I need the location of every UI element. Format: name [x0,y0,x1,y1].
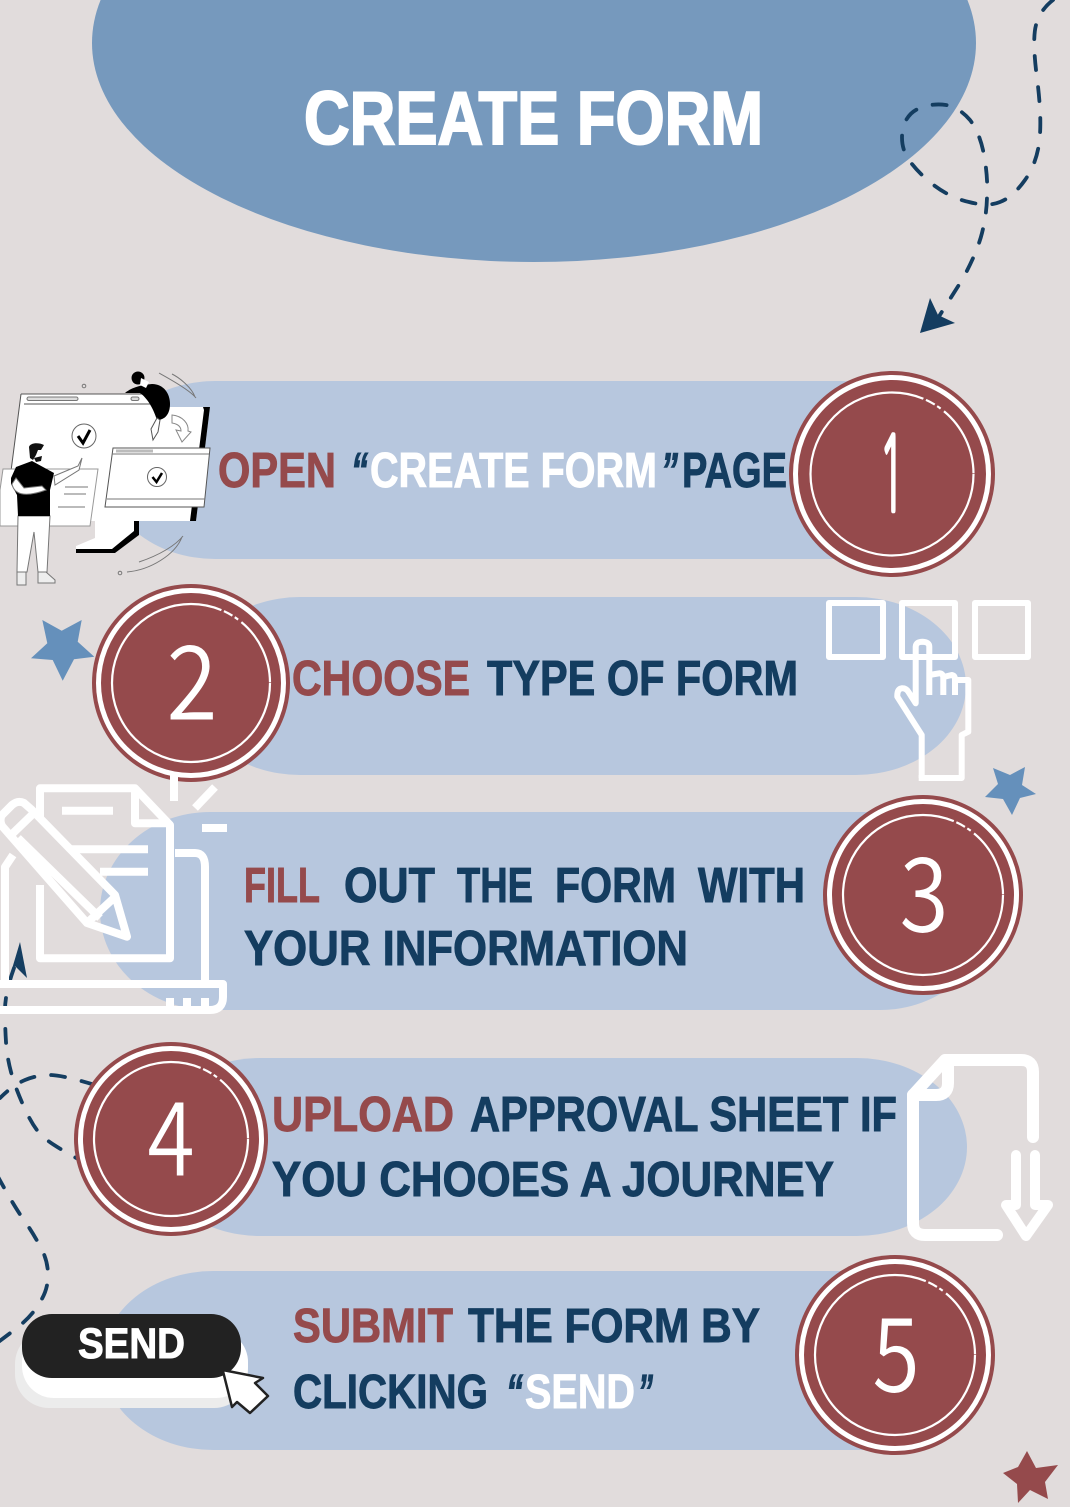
step 4 pill [150,1058,967,1236]
step 2 text: TYPE OF FORM [487,652,798,706]
icon: document and pencil on laptop [0,775,227,1010]
step 4 text: YOU CHOOES A JOURNEY [272,1153,834,1207]
step 5 pill [103,1271,985,1450]
step 5 text [293,1300,760,1419]
step 1 text: PAGE [682,444,787,498]
step 1 text: CREATE FORM [370,444,657,498]
step 3 pill [100,812,990,1010]
step 2 number badge [92,584,290,782]
step 2 text [292,652,798,706]
star: blue right [985,767,1036,815]
step 1 number badge: 1 [879,422,905,526]
step 2 text: CHOOSE [292,652,470,706]
step 5 text: “ [506,1366,523,1419]
step 3 text: FORM [555,859,676,913]
step 3 number badge [823,795,1023,995]
step 1 pill [105,381,950,559]
step 5 text: THE FORM BY [468,1300,760,1353]
step 2 pill [190,597,966,775]
title: CREATE FORM [304,76,763,160]
step 1 text: “ [351,444,368,498]
step 3 text: WITH [698,859,805,913]
step 1 text: ” [661,444,678,498]
send button [15,1314,248,1408]
step 5 text: CLICKING [293,1366,488,1419]
icon: hand selecting squares [829,603,1028,778]
step 5 number badge [795,1255,995,1455]
arrow: dashed path top right [902,0,1053,333]
step 2 number badge: 2 [166,599,218,750]
icon: document download [913,1060,1048,1236]
step 3 text: OUT [344,859,435,913]
step 5 text: SEND [525,1366,635,1419]
star: maroon [1003,1451,1058,1503]
step 4 text [272,1088,897,1207]
step 1 text [218,444,787,498]
step 5 number badge: 5 [872,1271,920,1422]
step 1 text: OPEN [218,444,336,498]
step 4 number badge: 4 [147,1055,195,1206]
star: blue left [31,620,94,681]
step 4 text: APPROVAL SHEET IF [470,1088,897,1142]
step 3 text: YOUR INFORMATION [244,922,688,976]
step 5 text: ” [638,1366,653,1419]
arrow: dashed path left side [0,942,95,1343]
step 4 number badge [74,1042,268,1236]
title banner ellipse [92,0,976,262]
icon: people with monitors illustration [0,372,210,585]
send button: SEND [78,1320,185,1368]
step 5 text: SUBMIT [293,1300,453,1353]
step 3 text [244,859,805,976]
step 1 number badge [789,371,995,577]
step 4 text: UPLOAD [272,1088,454,1142]
icon: mouse cursor [223,1370,268,1413]
step 3 text: FILL [244,859,320,913]
step 3 number badge: 3 [899,811,949,962]
step 3 text: THE [457,859,533,913]
